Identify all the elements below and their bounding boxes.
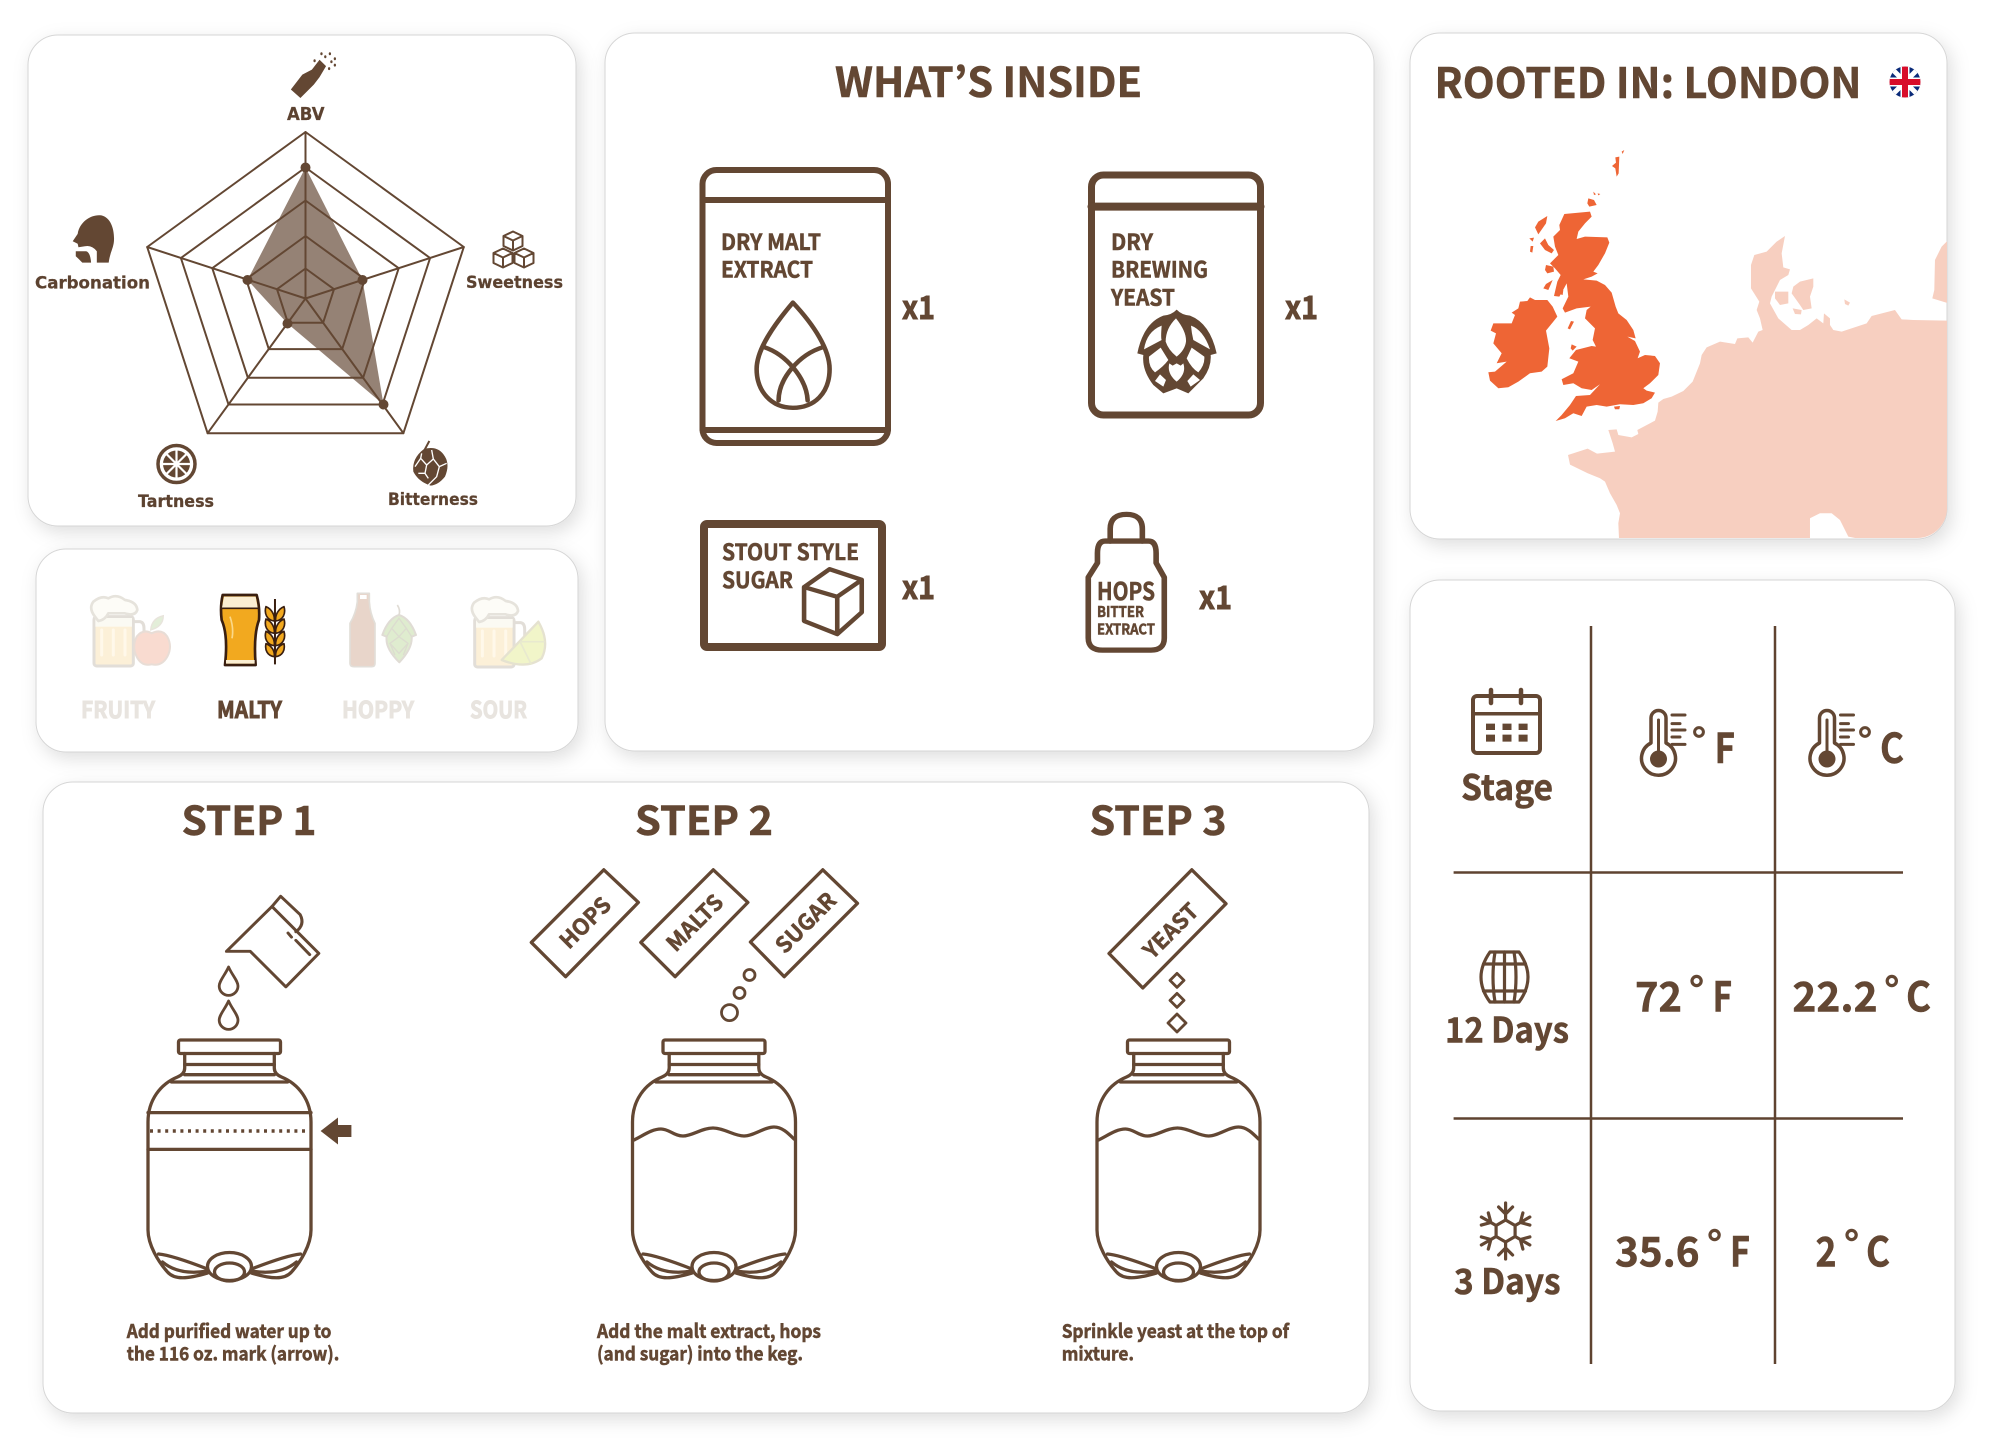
icon: fruity mug and apple [91, 596, 170, 666]
icon: barrel [1481, 952, 1528, 1002]
illustration: yeast packet: YEAST [1134, 895, 1205, 966]
heading: rooted in London: ROOTED IN: LONDON [1434, 50, 1862, 111]
item: stout style sugar box: STOUT STYLE [722, 535, 859, 567]
illustration: sugar packet: SUGAR [767, 884, 843, 960]
item: dry brewing yeast bag [1092, 175, 1260, 415]
value: 2 C: C [1866, 1219, 1890, 1279]
item: stout style sugar box [704, 524, 882, 647]
illustration: fermenter keg step 3 [1097, 1040, 1260, 1281]
text: step 3 description: Sprinkle yeast at the top of [1062, 1317, 1290, 1344]
label: HOPPY: HOPPY [342, 691, 415, 725]
label: Sweetness: Sweetness [466, 273, 563, 293]
text: step 1 description [126, 1317, 339, 1366]
label: Carbonation: Carbonation [35, 274, 150, 294]
illustration: malts packet [641, 870, 748, 977]
header: degrees Celsius [1810, 710, 1904, 775]
quantity: x1: x1 [902, 563, 935, 609]
item: stout style sugar box: SUGAR [722, 563, 793, 595]
header: degrees Fahrenheit: F [1715, 715, 1735, 775]
text: step 1 description: Add purified water up to [126, 1317, 331, 1344]
panel: flavour radar chart [28, 35, 576, 526]
icon: hoppy bottle and hop [350, 593, 416, 667]
text: step 2 description: (and sugar) into the keg. [597, 1339, 803, 1366]
text: step 1 description: the 116 oz. mark (arrow). [127, 1339, 339, 1366]
map: Europe and the British Isles [1488, 150, 1948, 538]
text: step 2 description: Add the malt extract, hops [596, 1317, 821, 1344]
quantity: x1: x1 [1199, 573, 1232, 619]
heading: step 1: STEP 1 [182, 789, 316, 847]
icon: bottle popping [291, 52, 336, 98]
icon: head profile [73, 215, 114, 263]
icon: malty glass and wheat [221, 595, 285, 665]
label: Stage: Stage [1461, 760, 1553, 811]
panel: rooted in London [1410, 33, 1948, 539]
icon: hop cone [413, 441, 447, 486]
panel: beer style selector [36, 549, 578, 752]
value: 2 C [1816, 1219, 1890, 1279]
heading: step 2: STEP 2 [635, 789, 773, 847]
label: SOUR: SOUR [470, 691, 527, 725]
icon: yeast granules [1168, 973, 1186, 1032]
item: hops bitter extract bottle [1088, 514, 1164, 650]
icon: calendar [1473, 690, 1540, 753]
quantity: x1: x1 [902, 283, 935, 329]
value: 35.6 F [1615, 1219, 1750, 1279]
illustration: hops packet: HOPS [551, 889, 618, 955]
value: 72 F: 72 [1635, 964, 1682, 1024]
item: hops bitter extract bottle: EXTRACT [1097, 618, 1155, 640]
value: 72 F: F [1713, 964, 1732, 1024]
value: 22.2 C [1792, 964, 1931, 1024]
label: FRUITY: FRUITY [81, 691, 156, 725]
illustration: sugar packet [750, 870, 858, 977]
icon: citrus slice [158, 446, 195, 482]
text: step 3 description [1062, 1317, 1290, 1366]
value: 22.2 C: 22.2 [1792, 964, 1878, 1024]
panel: fermentation table [1410, 580, 1955, 1411]
illustration: malts packet: MALTS [658, 886, 730, 958]
icon: UK flag [1889, 66, 1921, 98]
value: 72 F [1635, 964, 1732, 1024]
panel: brewing steps [43, 782, 1369, 1413]
item: dry brewing yeast bag: DRY [1111, 225, 1153, 257]
item: dry malt extract bag: DRY MALT [721, 225, 821, 257]
label: MALTY: MALTY [217, 691, 283, 725]
heading: what's inside: WHAT’S INSIDE [835, 49, 1142, 109]
item: hops bitter extract bottle: HOPS [1097, 572, 1155, 607]
label: Bitterness: Bitterness [388, 490, 478, 510]
value: 35.6 F: 35.6 [1615, 1219, 1700, 1279]
item: hops bitter extract bottle: BITTER [1097, 601, 1144, 622]
quantity: x1: x1 [1285, 283, 1318, 329]
arrow: 116 oz mark [321, 1118, 351, 1144]
illustration: fermenter keg step 1 [148, 1040, 311, 1281]
icon: snowflake [1478, 1203, 1533, 1259]
radar data polygon [242, 162, 388, 410]
label: Tartness: Tartness [138, 492, 214, 512]
item: dry brewing yeast bag: BREWING [1111, 252, 1208, 284]
icon: falling sugar bubbles [722, 970, 755, 1021]
value: 22.2 C: C [1906, 964, 1931, 1024]
item: dry malt extract bag: EXTRACT [721, 252, 813, 284]
label: ABV: ABV [287, 104, 325, 125]
illustration: yeast packet [1109, 870, 1226, 988]
value: 35.6 F: F [1730, 1219, 1750, 1279]
map: UK and Ireland [1488, 150, 1660, 421]
icon: sugar cubes [494, 232, 534, 268]
heading: step 3: STEP 3 [1090, 789, 1226, 847]
header: degrees Fahrenheit [1641, 710, 1735, 775]
label: 12 Days: 12 Days [1445, 1003, 1569, 1054]
value: 2 C: 2 [1816, 1219, 1836, 1279]
illustration: hops packet [531, 870, 638, 977]
header: degrees Celsius: C [1880, 715, 1904, 775]
illustration: fermenter keg step 2 [632, 1040, 796, 1281]
item: dry brewing yeast bag: YEAST [1110, 280, 1175, 312]
text: step 2 description [596, 1317, 821, 1366]
item: dry malt extract bag [702, 170, 888, 443]
panel: what's inside [605, 33, 1374, 751]
illustration: measuring jug pouring [226, 896, 319, 987]
radar grid [147, 132, 464, 433]
label: 3 Days: 3 Days [1454, 1254, 1561, 1305]
icon: sour mug and lime [472, 597, 545, 667]
icon: water droplets [219, 967, 238, 1029]
table grid [1454, 626, 1903, 1364]
text: step 3 description: mixture. [1062, 1339, 1134, 1366]
map: mainland Europe [1568, 236, 1948, 538]
